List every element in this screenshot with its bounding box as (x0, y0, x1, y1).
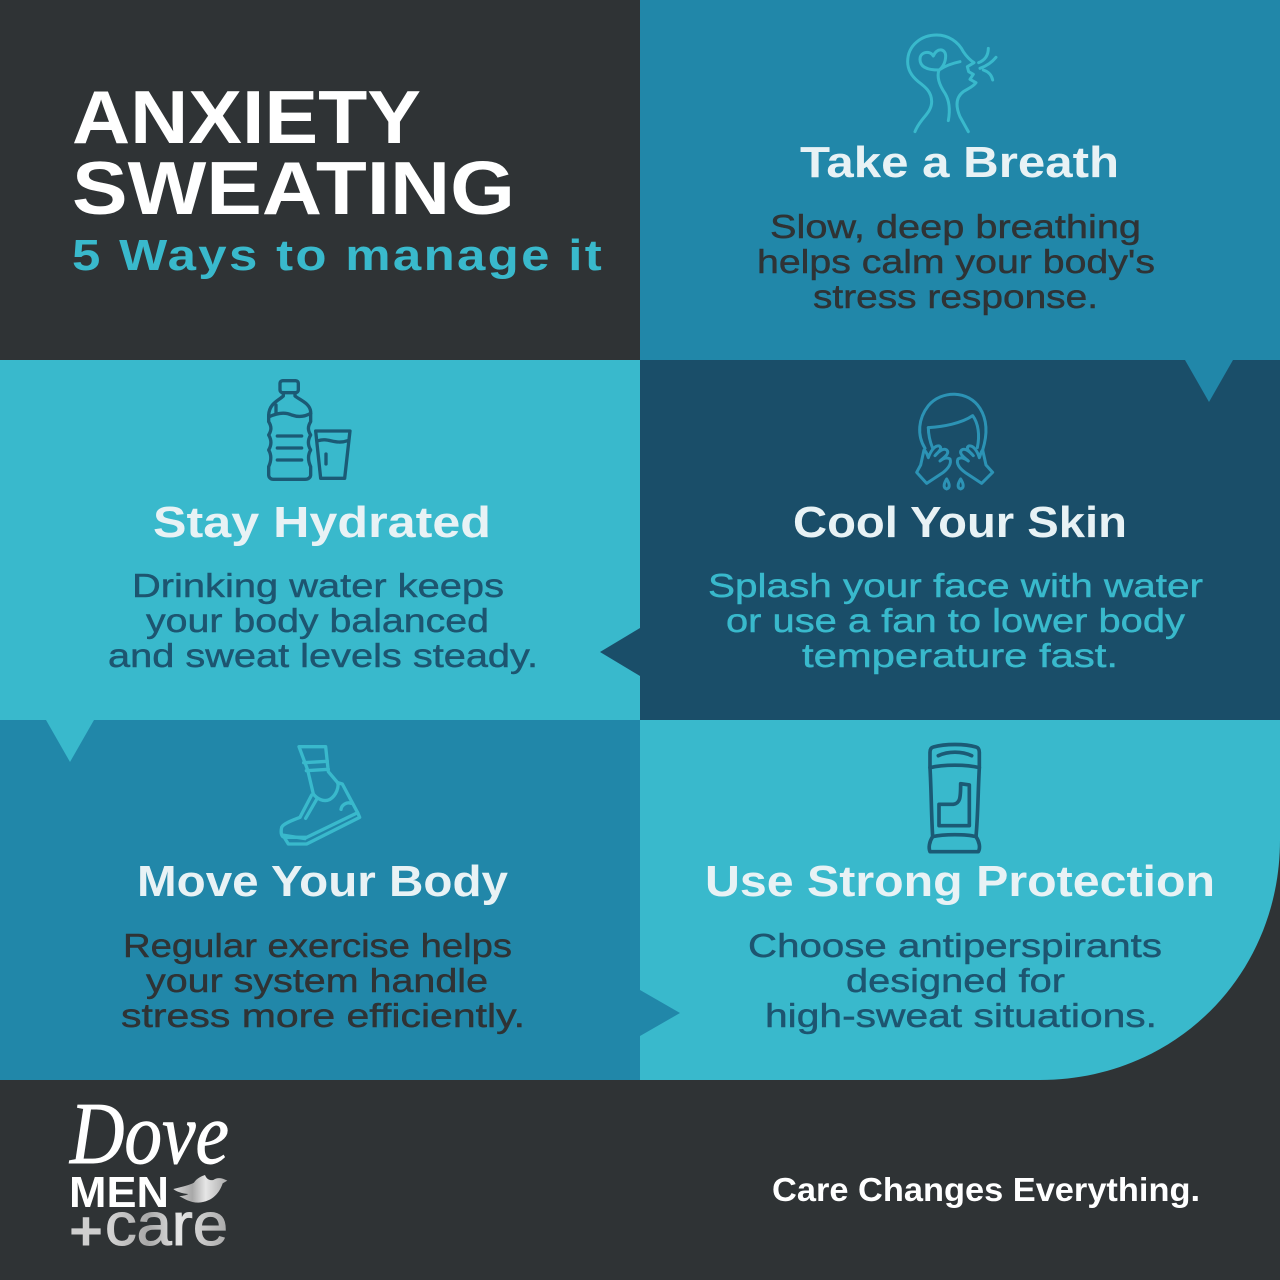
icon: water bottle and glass (269, 381, 350, 479)
text: use strong protection body (748, 927, 1162, 1034)
text: move your body body (121, 927, 525, 1034)
text: take a breath body (757, 208, 1155, 315)
text: cool your skin body: temperature fast. (802, 637, 1118, 674)
title (72, 75, 604, 280)
tagline: Care Changes Everything. (772, 1171, 1200, 1208)
logo: Dove Men+Care: care (105, 1191, 228, 1258)
icon: dove bird (173, 1175, 227, 1203)
heading: cool your skin: Cool Your Skin (793, 498, 1127, 547)
panel: take a breath (640, 0, 1280, 402)
icon: antiperspirant stick (929, 744, 980, 852)
title: SWEATING (72, 146, 515, 230)
panel: use strong protection (640, 720, 1280, 1080)
panel: stay hydrated (0, 360, 640, 762)
text: take a breath body: Slow, deep breathing (770, 208, 1141, 245)
logo: Dove Men+Care (69, 1086, 229, 1262)
arrow: to stay hydrated (600, 628, 640, 676)
heading: take a breath: Take a Breath (800, 138, 1119, 187)
logo: Dove Men+Care: Dove (69, 1086, 229, 1183)
logo: Dove Men+Care: + (69, 1199, 103, 1262)
text: use strong protection body: high-sweat situations. (765, 997, 1157, 1034)
title: ANXIETY (72, 75, 421, 159)
text: move your body body: Regular exercise helps (123, 927, 512, 964)
text: take a breath body: helps calm your body's (757, 243, 1155, 280)
arrow: to move your body (46, 720, 94, 762)
arrow: to use strong protection (640, 990, 680, 1036)
heading: move your body: Move Your Body (137, 857, 509, 906)
text: move your body body: stress more efficiently. (121, 997, 525, 1034)
text: take a breath body: stress response. (813, 278, 1098, 315)
text: cool your skin body: Splash your face with water (708, 567, 1203, 604)
icon: head breathing out (908, 35, 996, 132)
subtitle: 5 Ways to manage it (72, 231, 604, 280)
text: cool your skin body (708, 567, 1203, 674)
text: cool your skin body: or use a fan to lower body (726, 602, 1186, 639)
text: stay hydrated body: Drinking water keeps (132, 567, 504, 604)
text: stay hydrated body: your body balanced (146, 602, 489, 639)
logo: Dove Men+Care: MEN (69, 1168, 169, 1217)
text: stay hydrated body: and sweat levels steady. (108, 637, 538, 674)
icon: running shoe (281, 747, 360, 844)
arrow: to cool your skin (1185, 360, 1233, 402)
text: use strong protection body: designed for (846, 962, 1065, 999)
icon: splashing face (917, 394, 993, 489)
panel: move your body (0, 720, 680, 1080)
heading: stay hydrated: Stay Hydrated (153, 498, 491, 547)
text: stay hydrated body (108, 567, 538, 674)
text: move your body body: your system handle (146, 962, 488, 999)
text: use strong protection body: Choose antiperspirants (748, 927, 1162, 964)
panel: cool your skin (600, 360, 1280, 720)
heading: use strong protection: Use Strong Protection (705, 857, 1215, 906)
